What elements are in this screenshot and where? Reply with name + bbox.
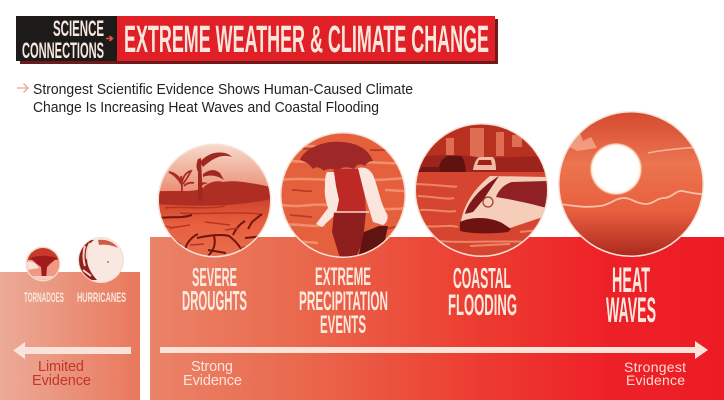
series label box: SCIENCE (53, 16, 104, 41)
label: limited evidence (32, 359, 91, 389)
infographic: COASTAL (453, 263, 511, 295)
label: severe droughts (182, 262, 247, 316)
header banner (16, 16, 498, 64)
label: limited evidence: Limited (38, 359, 84, 375)
panel: strong to strongest evidence (150, 237, 724, 400)
title bar (117, 16, 495, 61)
label: strongest evidence: Evidence (626, 372, 685, 388)
banner shadow (20, 19, 498, 64)
arrow: limited evidence (13, 342, 131, 359)
infographic: FLOODING (448, 289, 517, 322)
label: coastal flooding (448, 263, 517, 322)
series label box: CONNECTIONS (22, 38, 104, 63)
infographic: HEAT (612, 261, 650, 300)
label: strongest evidence (624, 359, 686, 388)
label: heat waves (606, 261, 656, 330)
subtitle (17, 82, 413, 116)
arrow: strong evidence (160, 341, 708, 359)
icon: hurricane circle (78, 237, 124, 283)
label: extreme precipitation events: EXTREME (315, 263, 371, 291)
infographic: PRECIPITATION (299, 286, 388, 316)
label: strong evidence: Strong (191, 359, 233, 375)
icon: precipitation circle (280, 132, 406, 258)
label: strong evidence: Evidence (183, 373, 242, 389)
panel: limited evidence (0, 272, 140, 400)
label: extreme precipitation events: EVENTS (320, 311, 366, 339)
icon: droughts circle (158, 143, 272, 259)
infographic: DROUGHTS (182, 285, 247, 316)
label: strongest evidence: Strongest (624, 359, 686, 375)
icon: heat waves circle (558, 111, 704, 258)
infographic: TORNADOES (24, 289, 64, 305)
icon: tornado circle (26, 246, 60, 282)
label: severe droughts: SEVERE (192, 262, 237, 292)
label: strong evidence (183, 359, 242, 389)
label: limited evidence: Evidence (32, 373, 91, 389)
icon: arrow (17, 84, 28, 92)
series label box (16, 16, 117, 63)
label: hurricanes: HURRICANES (77, 289, 126, 305)
subtitle: Change Is Increasing Heat Waves and Coastal Flooding (33, 100, 379, 116)
subtitle: Strongest Scientific Evidence Shows Human-Caused Climate (33, 82, 413, 98)
icon: coastal flooding circle (414, 122, 549, 258)
label: extreme precipitation events (299, 263, 388, 339)
